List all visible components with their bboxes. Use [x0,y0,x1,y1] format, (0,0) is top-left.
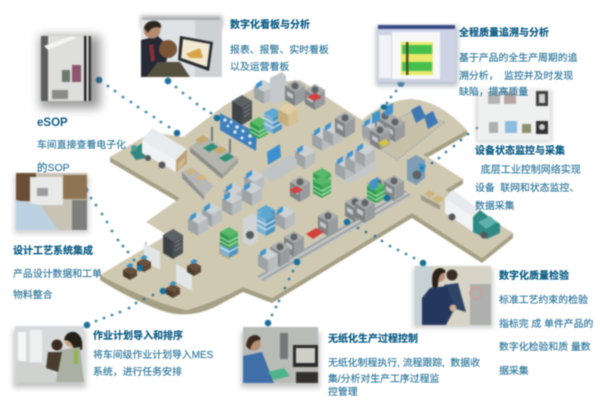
text: digital inspection: 指标完 成 单件产品的 [499,319,593,330]
text: paperless process control: 集/分析对生产工序过程监 [328,374,439,385]
text: job scheduling: 系统，进行任务安排 [93,367,182,378]
photo: technician at microscope [241,327,320,388]
text: eSOP [36,116,126,174]
tall control unit [407,155,426,185]
text: eSOP: 车间直接查看电子化 [37,140,126,151]
leader: dashboard [165,78,220,121]
text: digital dashboard [230,18,329,73]
lower centre cells: green-tan tower, unit, blue rack [219,205,295,260]
left truck [130,128,187,172]
text: digital inspection: 据采集 [499,366,529,377]
text: design integration: 物料整合 [13,290,53,301]
round bay machining cell [362,103,438,150]
back row: cabinets, racks, silos [232,72,305,139]
text: digital dashboard: 报表、报警、实时看板 [230,45,329,56]
middle row machines [188,112,355,236]
main production line [256,175,412,282]
text: equipment monitoring: 数据采集 [475,201,515,212]
text: digital inspection: 数字化质量检验 [499,271,569,282]
text: digital inspection [498,269,594,377]
text: full process quality tracing: 缺陷，提高质量 [459,87,528,98]
text: design integration: 产品设计数据和工单 [13,269,102,280]
text: equipment monitoring [474,144,582,212]
text: eSOP: eSOP [37,117,68,129]
text: design integration [12,244,102,301]
text: equipment monitoring: 底层工业控制网络实现 [481,165,581,176]
photo: inspection team [413,266,493,328]
text: job scheduling [92,329,214,378]
text: full process quality tracing: 溯分析， 监控并及时发现 [459,71,573,82]
text: full process quality tracing: 基于产品的全生产周期的追 [459,53,578,64]
text: job scheduling: 将车间级作业计划导入MES [93,350,213,361]
text: design integration: 设计工艺系统集成 [13,246,93,257]
packing conveyor near left truck [182,167,214,200]
text: paperless process control: 控管理 [328,387,358,398]
text: full process quality tracing: 全程质量追溯与分析 [459,28,549,39]
leader: equipment monitoring [384,119,488,201]
right truck [421,190,500,239]
photo: equipment monitoring thumbnails [476,89,552,142]
factory floor [100,80,513,314]
text: eSOP: 的SOP [37,162,70,174]
text: equipment monitoring: 设备 联网和状态监控、 [475,183,579,194]
photo: people at dashboard [141,16,222,77]
text: full process quality tracing [458,26,578,98]
photo: eSOP screen [40,36,100,108]
left office area [123,229,201,298]
leader: paperless control [265,259,300,326]
text: digital dashboard: 数字化看板与分析 [230,20,310,31]
text: job scheduling: 作业计划导入和排序 [93,331,183,342]
text: digital inspection: 数字化检验和质 量数 [499,342,591,353]
leader: design integration [82,187,143,271]
leader: eSOP [96,77,180,136]
leader: scheduling [84,288,166,328]
text: digital dashboard: 以及运营看板 [230,62,289,73]
grey and red press machine [305,84,325,110]
text: paperless process control: 无纸化制程执行, 流程跟踪, 数据收 [328,358,480,369]
photo: quality tracing software screenshot [376,25,458,86]
packing stations [190,127,238,179]
photo: design engineer [14,173,89,234]
text: equipment monitoring: 设备状态监控与采集 [475,146,565,157]
text: digital inspection: 标准工艺约束的检验 [499,295,588,306]
blue dashboard wall panel [220,113,257,151]
machining cell dashed border [363,112,445,160]
text: paperless process control: 无纸化生产过程控制 [328,334,418,345]
text: paperless process control [328,332,480,398]
leader: digital inspection [344,219,426,266]
right assembly stations [289,143,376,202]
leader: quality tracing [380,81,404,110]
photo: planners at computers [13,326,86,388]
